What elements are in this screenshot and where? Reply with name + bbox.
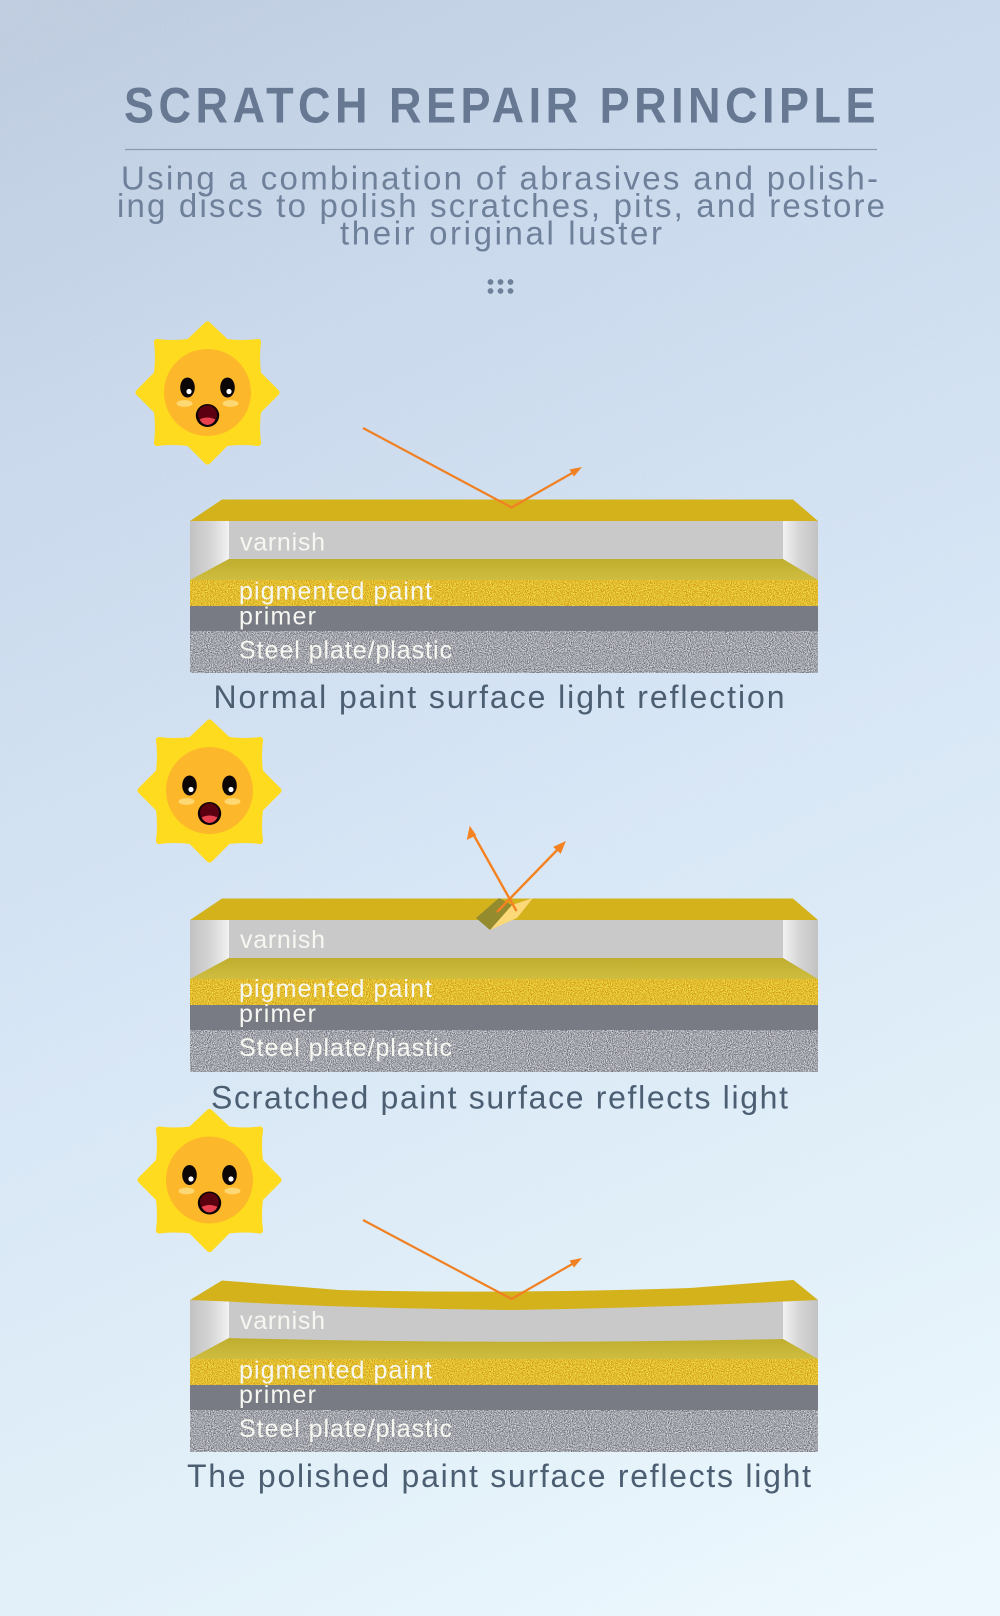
icon: sun 3: [140, 1112, 279, 1249]
arrow: reflected light 1: [363, 428, 582, 508]
layer labels: pigmented paint: [239, 578, 432, 606]
panel: scratched paint layers: [190, 898, 818, 1072]
subtitle: Using a combination of abrasives and polish-: [121, 160, 878, 196]
layer labels: pigmented paint: [239, 975, 432, 1003]
icon: sun 2: [140, 723, 279, 860]
caption 1: Normal paint surface light reflection: [214, 679, 784, 715]
dots ornament: [488, 279, 513, 294]
layer labels: Steel plate/plastic: [239, 636, 452, 664]
layer labels: [239, 1307, 452, 1443]
arrows: scattered light: [468, 827, 565, 912]
layer labels: Steel plate/plastic: [239, 1415, 452, 1443]
layer labels: primer: [239, 1000, 316, 1028]
layer labels: [239, 926, 452, 1062]
layer labels: varnish: [240, 528, 325, 556]
layer labels: Steel plate/plastic: [239, 1034, 452, 1062]
subtitle: ing discs to polish scratches, pits, and restore: [117, 187, 885, 224]
title: SCRATCH REPAIR PRINCIPLE: [124, 78, 876, 134]
panel: polished paint layers: [190, 1280, 818, 1452]
caption 3: The polished paint surface reflects light: [187, 1458, 811, 1494]
layer labels: varnish: [240, 1307, 325, 1335]
layer labels: primer: [239, 602, 316, 630]
caption 2: Scratched paint surface reflects light: [211, 1080, 788, 1116]
panel: normal paint layers: [190, 500, 818, 673]
icon: sun 1: [138, 325, 277, 462]
layer labels: [239, 528, 452, 664]
layer labels: varnish: [240, 926, 325, 954]
arrow: reflected light 3: [363, 1220, 582, 1299]
layer labels: primer: [239, 1381, 316, 1409]
scratch in varnish: [476, 898, 533, 930]
layer labels: pigmented paint: [239, 1356, 432, 1384]
subtitle: their original luster: [340, 214, 662, 252]
subtitle: [117, 160, 885, 252]
